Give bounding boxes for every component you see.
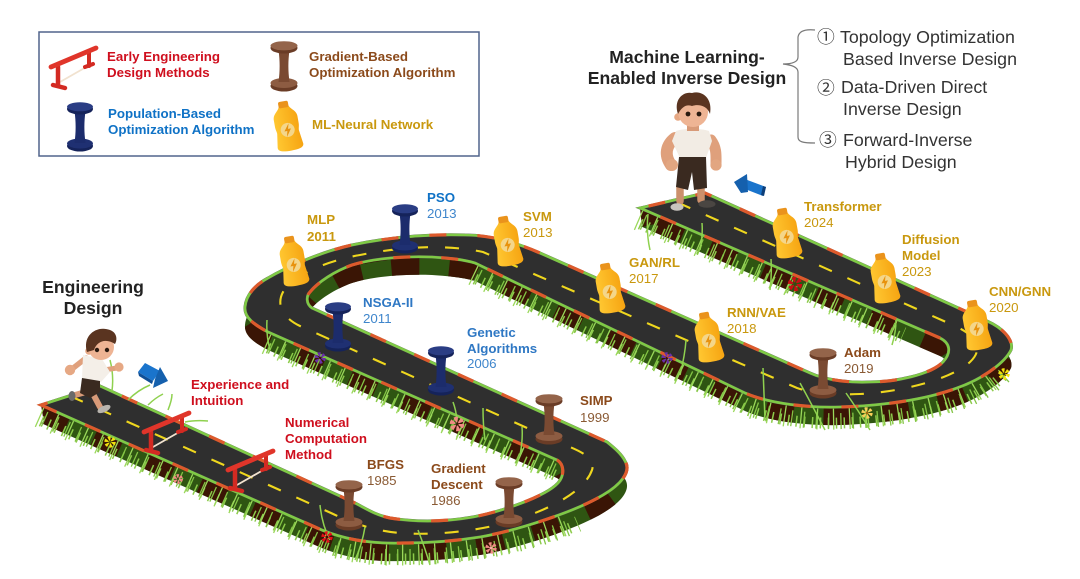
bottle: diffusion model: [867, 251, 901, 305]
legend icon: brown dumbbell: [270, 41, 298, 92]
heading: machine learning-enabled inverse design: Enabled Inverse Design: [588, 68, 786, 88]
label: diffusion model: Model: [902, 248, 940, 263]
label: MLP: MLP: [307, 212, 335, 227]
legend panel: [39, 32, 479, 156]
bottle: MLP: [276, 234, 310, 288]
bottle: CNN/GNN: [959, 298, 993, 352]
label: gradient descent: 1986: [431, 493, 461, 508]
item 1: Based Inverse Design: [843, 49, 1017, 69]
label: Transformer: 2024: [804, 215, 834, 230]
hurdle: numerical computation: [228, 451, 273, 491]
label: gradient descent: Gradient: [431, 461, 486, 476]
road: [39, 193, 1011, 565]
item 3: Hybrid Design: [845, 152, 957, 172]
legend label: gradient-based: Gradient-Based: [309, 49, 408, 64]
label: PSO: 2013: [427, 206, 457, 221]
bottle: GAN/RL: [592, 261, 626, 315]
arrow: lower blue: [138, 363, 168, 388]
flower: yellow: [106, 438, 114, 446]
label: numerical computation method: Numerical: [285, 415, 349, 430]
item 2: Data-Driven Direct: [841, 77, 987, 97]
label: SIMP: SIMP: [580, 393, 613, 408]
label: GAN/RL: 2017: [629, 271, 659, 286]
bottle: Transformer: [769, 206, 803, 260]
item 1: Topology Optimization: [840, 27, 1015, 47]
flower: pink: [175, 476, 181, 482]
flower: amber: [864, 410, 870, 416]
item 2: Inverse Design: [843, 99, 962, 119]
label: numerical computation method: Method: [285, 447, 332, 462]
flower: large pink: [452, 420, 462, 428]
label: experience and intuition: Experience and: [191, 377, 289, 392]
dumbbell: SIMP: [536, 394, 562, 444]
heading: engineering design: Engineering: [42, 277, 144, 297]
label: genetic algorithms: Algorithms: [467, 341, 537, 356]
label: diffusion model: Diffusion: [902, 232, 960, 247]
label: SVM: 2013: [523, 225, 553, 240]
label: RNN/VAE: RNN/VAE: [727, 305, 786, 320]
legend label: early engineering: Early Engineering: [107, 49, 220, 64]
label: GAN/RL: GAN/RL: [629, 255, 680, 270]
hurdle: experience and intuition: [144, 413, 189, 453]
label: genetic algorithms: Genetic: [467, 325, 516, 340]
label: BFGS: BFGS: [367, 457, 404, 472]
item 3: Forward-Inverse: [843, 130, 973, 150]
arrow: upper blue: [734, 174, 766, 196]
legend label: early engineering: Design Methods: [107, 65, 210, 80]
label: gradient descent: Descent: [431, 477, 483, 492]
label: numerical computation method: Computation: [285, 431, 367, 446]
legend icon: navy dumbbell: [67, 102, 93, 152]
label: CNN/GNN: CNN/GNN: [989, 284, 1051, 299]
legend label: ML neural network: ML-Neural Network: [312, 117, 434, 132]
label: Transformer: Transformer: [804, 199, 882, 214]
legend icon: bottle: [270, 99, 304, 153]
label: MLP: 2011: [307, 229, 336, 244]
label: CNN/GNN: 2020: [989, 300, 1019, 315]
character: standing boy: [666, 92, 722, 211]
label: NSGA-II: 2011: [363, 311, 392, 326]
dumbbell: genetic algorithms: [428, 346, 454, 396]
dumbbell: BFGS: [336, 480, 362, 530]
label: RNN/VAE: 2018: [727, 321, 757, 336]
label: SIMP: 1999: [580, 410, 610, 425]
flower: purple right: [664, 354, 670, 362]
label: BFGS: 1985: [367, 473, 397, 488]
label: diffusion model: 2023: [902, 264, 932, 279]
label: SVM: SVM: [523, 209, 552, 224]
dumbbell: Adam: [810, 348, 836, 398]
dumbbell: gradient descent: [496, 477, 522, 528]
list: inverse design categories: [817, 23, 1017, 172]
flower: pink small: [488, 544, 494, 552]
label: Adam: 2019: [844, 361, 874, 376]
dumbbell: PSO: [392, 204, 418, 254]
bottle: SVM: [490, 214, 524, 268]
bracket: [783, 30, 815, 143]
dumbbell: NSGA-II: [325, 302, 351, 352]
flower: purple left: [316, 354, 324, 362]
item 2: ②: [817, 74, 835, 100]
label: Adam: Adam: [844, 345, 881, 360]
heading: machine learning-enabled inverse design: Machine Learning-: [609, 47, 765, 67]
label: experience and intuition: Intuition: [191, 393, 243, 408]
heading: engineering design: Design: [64, 298, 122, 318]
label: PSO: PSO: [427, 190, 455, 205]
label: NSGA-II: NSGA-II: [363, 295, 413, 310]
label: genetic algorithms: 2006: [467, 356, 497, 371]
bottle: RNN/VAE: [691, 310, 725, 364]
flower: red: [324, 534, 330, 540]
legend label: gradient-based: Optimization Algorithm: [309, 65, 456, 80]
item 3: ③: [819, 126, 837, 152]
flower: dark red: [790, 280, 800, 288]
item 1: ①: [817, 23, 835, 49]
legend icon: hurdle: [51, 48, 96, 88]
legend label: population-based: Optimization Algorithm: [108, 122, 254, 137]
flower: yellow right: [1000, 370, 1008, 378]
character: running boy: [65, 329, 124, 415]
legend label: population-based: Population-Based: [108, 106, 221, 121]
